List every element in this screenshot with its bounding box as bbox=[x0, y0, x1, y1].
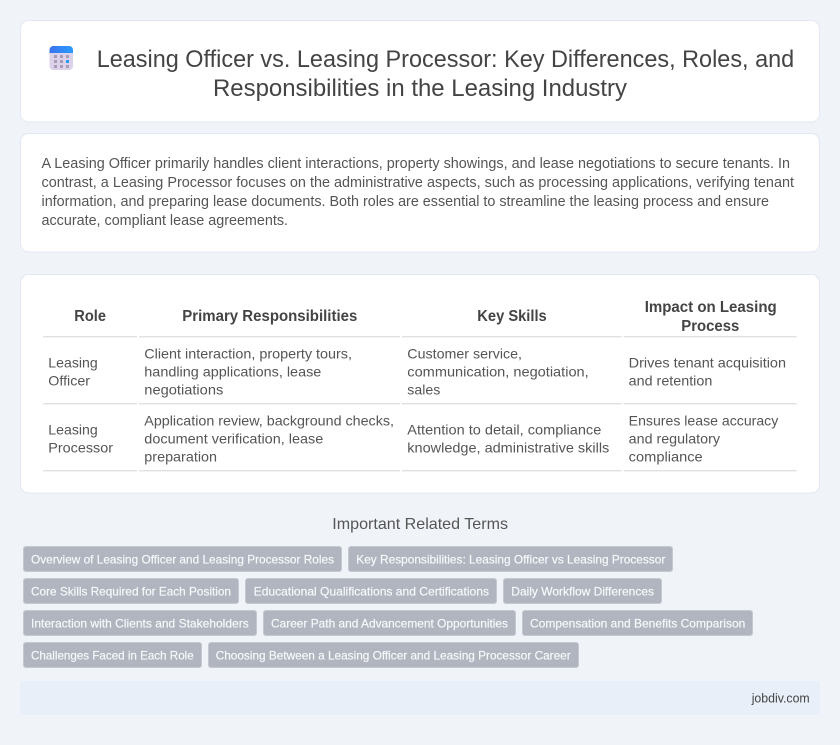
table row: Leasing Officer: communication, negotiation, bbox=[407, 363, 589, 379]
tags row 3: Interaction with Clients and Stakeholders bbox=[31, 616, 249, 630]
panel: header bbox=[20, 20, 820, 122]
panel: introduction bbox=[20, 134, 820, 252]
table row: Leasing Processor: Application review, background checks, bbox=[144, 412, 394, 428]
tags row 4: Challenges Faced in Each Role bbox=[31, 648, 194, 662]
tags row 2: Educational Qualifications and Certifications bbox=[254, 584, 489, 598]
table header row: Impact on Leasing bbox=[645, 299, 777, 316]
table row: Leasing Officer: handling applications, lease bbox=[144, 363, 322, 379]
table row: Leasing Officer: Drives tenant acquisition bbox=[629, 354, 786, 370]
table row: Leasing Officer: Leasing bbox=[48, 354, 98, 370]
tags row 2: Daily Workflow Differences bbox=[511, 584, 654, 598]
tags row 1: Overview of Leasing Officer and Leasing Processor Roles bbox=[31, 552, 334, 566]
text block: introduction: information, and preparing lease documents. Both roles are essential to streamline the leasing process and ensure bbox=[42, 194, 769, 210]
table row: Leasing Officer: sales bbox=[407, 381, 440, 397]
table row: Leasing Officer: Customer service, bbox=[407, 345, 522, 361]
section: related terms bbox=[24, 516, 752, 668]
table row: Leasing Processor: compliance bbox=[629, 448, 703, 464]
table row: Leasing Processor: preparation bbox=[144, 448, 217, 464]
text block: introduction: A Leasing Officer primarily handles client interactions, property showings, and lease negotiations to secure tenants. In bbox=[42, 156, 790, 172]
tags row 3: Career Path and Advancement Opportunities bbox=[271, 616, 508, 630]
panel: comparison table bbox=[20, 274, 820, 493]
text block: introduction bbox=[42, 156, 794, 229]
icon: calendar bbox=[50, 46, 73, 70]
table row: Leasing Processor: and regulatory bbox=[629, 430, 720, 446]
tags row 4 bbox=[24, 642, 578, 668]
table row: Leasing Officer: negotiations bbox=[144, 381, 223, 397]
tags row 2 bbox=[24, 578, 662, 604]
table row: Leasing Officer: Client interaction, property tours, bbox=[144, 345, 352, 361]
title bbox=[97, 46, 794, 102]
table row: Leasing Processor: Attention to detail, compliance bbox=[407, 421, 602, 437]
tags row 1 bbox=[24, 546, 672, 572]
footer: jobdiv.com bbox=[751, 690, 810, 706]
text block: introduction: contrast, a Leasing Processor focuses on the administrative aspects, such as processing applications, verifying tenant bbox=[42, 175, 794, 191]
tags row 4: Choosing Between a Leasing Officer and Leasing Processor Career bbox=[216, 648, 571, 662]
title: Leasing Officer vs. Leasing Processor: Key Differences, Roles, and bbox=[97, 46, 794, 73]
table header row: Primary Responsibilities bbox=[182, 308, 357, 325]
table row: Leasing Officer bbox=[43, 345, 797, 404]
tags row 3: Compensation and Benefits Comparison bbox=[530, 616, 745, 630]
table header row: Key Skills bbox=[477, 308, 547, 325]
tags row 1: Key Responsibilities: Leasing Officer vs Leasing Processor bbox=[356, 552, 665, 566]
table row: Leasing Officer: Officer bbox=[48, 372, 90, 388]
title: Responsibilities in the Leasing Industry bbox=[213, 75, 627, 102]
tags row 3 bbox=[24, 610, 752, 636]
tags row 2: Core Skills Required for Each Position bbox=[31, 584, 231, 598]
table header row bbox=[43, 299, 797, 337]
table header row: Role bbox=[74, 308, 106, 325]
table row: Leasing Processor: knowledge, administrative skills bbox=[407, 439, 609, 455]
table header row: Process bbox=[681, 318, 739, 335]
table row: Leasing Processor: Ensures lease accuracy bbox=[629, 412, 778, 428]
table row: Leasing Processor: Processor bbox=[48, 439, 113, 455]
text block: introduction: accurate, compliant lease agreements. bbox=[42, 213, 288, 229]
table row: Leasing Processor bbox=[43, 412, 797, 471]
footer bbox=[20, 681, 820, 715]
table row: Leasing Processor: Leasing bbox=[48, 421, 98, 437]
table row: Leasing Officer: and retention bbox=[629, 372, 712, 388]
table row: Leasing Processor: document verification, lease bbox=[144, 430, 324, 446]
heading: related terms: Important Related Terms bbox=[332, 516, 508, 533]
